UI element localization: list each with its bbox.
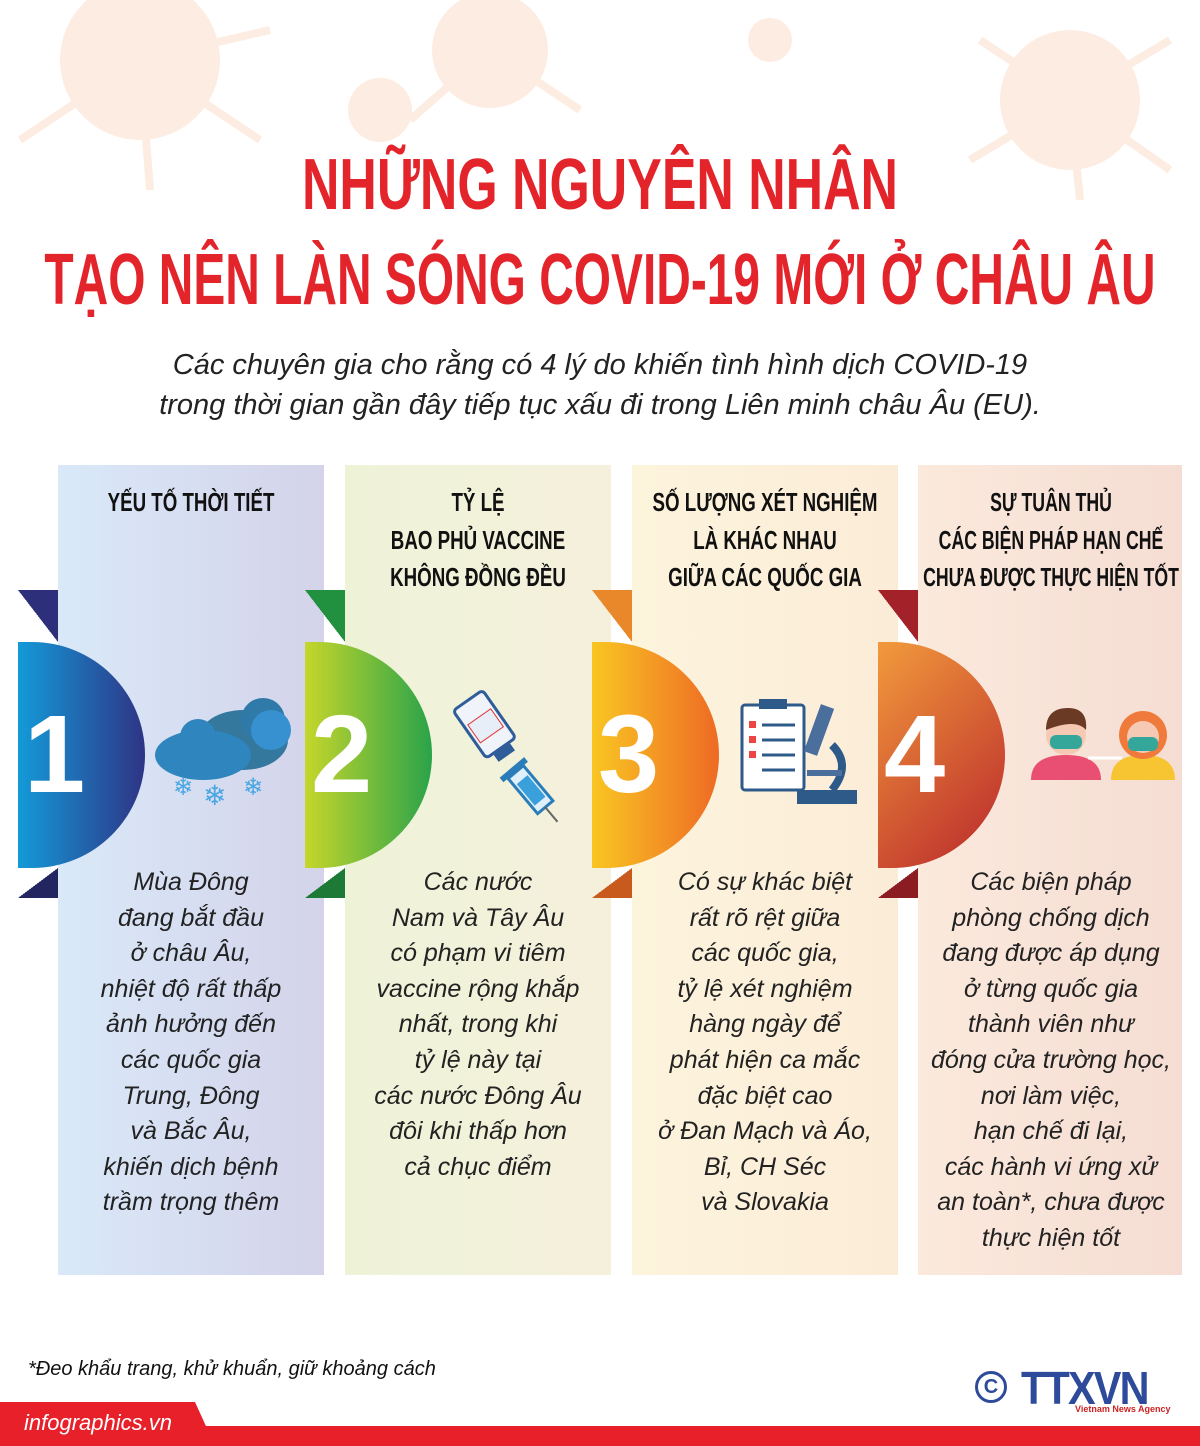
badge 1	[18, 642, 145, 868]
text 3: và Slovakia	[701, 1188, 829, 1216]
text 1: nhiệt độ rất thấp	[101, 975, 281, 1003]
text 4: thực hiện tốt	[982, 1224, 1120, 1252]
text 3: ở Đan Mạch và Áo,	[658, 1117, 872, 1145]
footer bar: infographics.vn	[24, 1410, 172, 1435]
icon: snow clouds: ❄	[243, 774, 263, 801]
text 2: các nước Đông Âu	[374, 1082, 582, 1110]
text 1: ở châu Âu,	[131, 939, 251, 967]
text 4: thành viên như	[968, 1010, 1134, 1038]
logo: TTXVN	[975, 1362, 1171, 1414]
text 3: rất rõ rệt giữa	[690, 904, 840, 932]
badge 4: 4	[884, 693, 945, 816]
text 2: nhất, trong khi	[399, 1010, 557, 1038]
heading 4: SỰ TUÂN THỦ	[990, 487, 1112, 517]
text 3: các quốc gia,	[691, 939, 839, 967]
text 1: ảnh hưởng đến	[106, 1010, 276, 1038]
logo: TTXVN: Vietnam News Agency	[1075, 1404, 1171, 1414]
text 1: Trung, Đông	[122, 1082, 260, 1110]
logo: TTXVN: TTXVN	[1021, 1362, 1148, 1414]
heading 4: CHƯA ĐƯỢC THỰC HIỆN TỐT	[923, 562, 1179, 592]
text 4: đóng cửa trường học,	[931, 1046, 1171, 1074]
footer bar	[0, 1402, 1200, 1446]
subtitle: Các chuyên gia cho rằng có 4 lý do khiến tình hình dịch COVID-19	[173, 349, 1027, 381]
text 2: đôi khi thấp hơn	[389, 1117, 567, 1145]
title	[44, 144, 1156, 320]
text 4: Các biện pháp	[970, 868, 1132, 896]
footnote: *Đeo khẩu trang, khử khuẩn, giữ khoảng cách	[28, 1358, 436, 1380]
text 3: Bỉ, CH Séc	[704, 1153, 826, 1181]
text 1: Mùa Đông	[133, 868, 249, 896]
badge 1: 1	[24, 693, 85, 816]
icon: snow clouds: ❄	[173, 774, 193, 801]
text 2: có phạm vi tiêm	[390, 939, 566, 967]
badge 3: 3	[598, 693, 659, 816]
text 4	[931, 868, 1171, 1252]
text 2: cả chục điểm	[404, 1153, 552, 1181]
text 1: khiến dịch bệnh	[103, 1153, 279, 1181]
panel: vaccine	[305, 465, 611, 1275]
text 4: đang được áp dụng	[942, 939, 1160, 967]
text 4: an toàn*, chưa được	[937, 1188, 1165, 1216]
text 4: nơi làm việc,	[981, 1082, 1121, 1110]
text 3: hàng ngày để	[689, 1010, 841, 1038]
logo: TTXVN: C	[984, 1376, 998, 1398]
text 3	[658, 868, 872, 1216]
heading 1: YẾU TỐ THỜI TIẾT	[108, 487, 274, 517]
heading 2	[390, 487, 566, 592]
heading 3: SỐ LƯỢNG XÉT NGHIỆM	[653, 487, 877, 517]
title: TẠO NÊN LÀN SÓNG COVID-19 MỚI Ở CHÂU ÂU	[44, 240, 1156, 320]
background virus decorations	[18, 0, 1172, 200]
badge 4	[878, 642, 1005, 868]
panel: weather	[18, 465, 324, 1275]
text 2: tỷ lệ này tại	[415, 1046, 541, 1074]
text 2	[374, 868, 582, 1181]
icon: vaccine	[453, 690, 558, 822]
icon: clipboard and microscope	[740, 699, 857, 804]
heading 4: CÁC BIỆN PHÁP HẠN CHẾ	[939, 524, 1163, 554]
badge 3	[592, 642, 719, 868]
text 1: đang bắt đầu	[118, 904, 264, 932]
badge 2	[305, 642, 432, 868]
text 1: và Bắc Âu,	[131, 1117, 251, 1145]
text 4: hạn chế đi lại,	[974, 1117, 1128, 1145]
text 3: phát hiện ca mắc	[670, 1046, 860, 1074]
text 1: trầm trọng thêm	[103, 1188, 279, 1216]
text 2: Nam và Tây Âu	[392, 904, 564, 932]
heading 2: TỶ LỆ	[451, 487, 505, 517]
heading 2: KHÔNG ĐỒNG ĐỀU	[390, 562, 566, 592]
text 4: ở từng quốc gia	[964, 975, 1138, 1003]
panel: testing	[592, 465, 898, 1275]
heading 4	[923, 487, 1179, 592]
text 4: các hành vi ứng xử	[945, 1153, 1157, 1181]
subtitle	[159, 349, 1041, 421]
heading 3	[653, 487, 877, 592]
panel: compliance	[878, 465, 1182, 1275]
icon: two masked people	[1031, 708, 1175, 780]
title: NHỮNG NGUYÊN NHÂN	[302, 145, 898, 225]
text 3: Có sự khác biệt	[678, 868, 852, 896]
text 2: vaccine rộng khắp	[377, 975, 579, 1003]
text 4: phòng chống dịch	[952, 904, 1150, 932]
text 3: tỷ lệ xét nghiệm	[677, 975, 853, 1003]
heading 2: BAO PHỦ VACCINE	[391, 524, 565, 554]
text 1: các quốc gia	[121, 1046, 261, 1074]
text 2: Các nước	[424, 868, 532, 896]
text 1	[101, 868, 281, 1216]
heading 3: LÀ KHÁC NHAU	[693, 524, 837, 554]
badge 2: 2	[311, 693, 372, 816]
heading 3: GIỮA CÁC QUỐC GIA	[668, 562, 862, 592]
subtitle: trong thời gian gần đây tiếp tục xấu đi trong Liên minh châu Âu (EU).	[159, 389, 1041, 421]
text 3: đặc biệt cao	[698, 1082, 832, 1110]
icon: snow clouds	[155, 698, 291, 810]
